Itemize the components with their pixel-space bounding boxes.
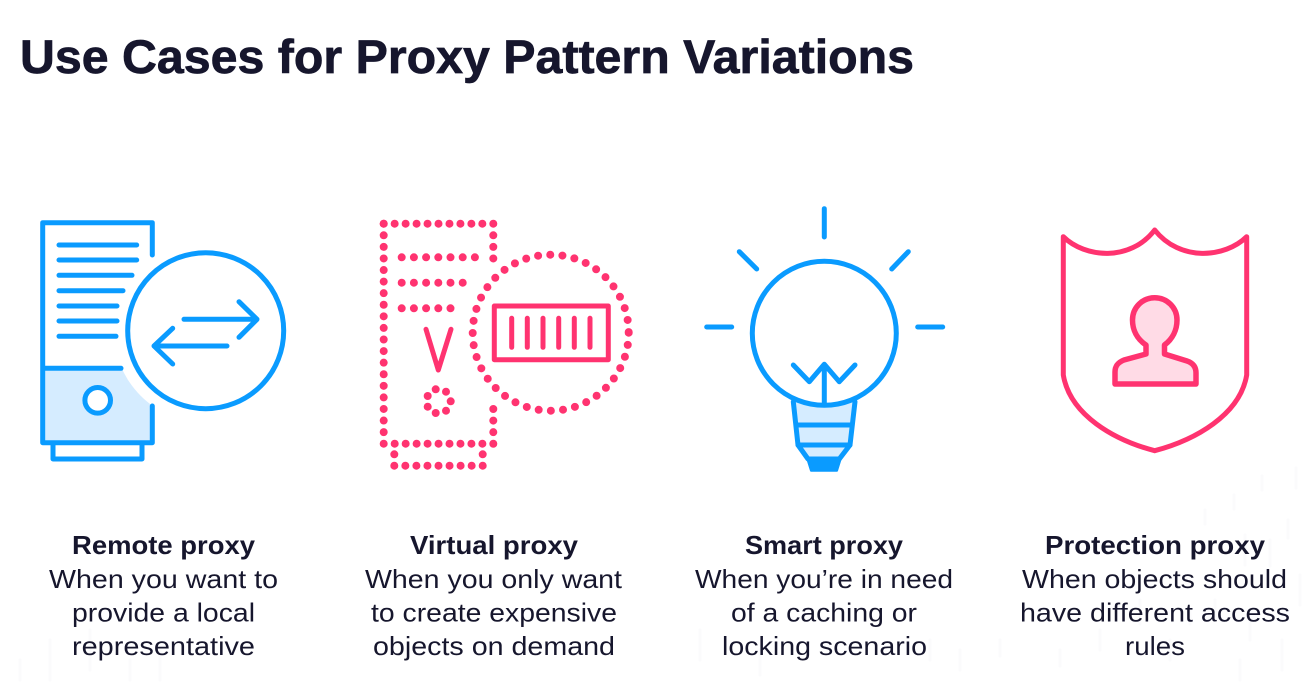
text block: remote proxy [49, 530, 278, 661]
text block: remote proxy: Remote proxy [72, 530, 256, 560]
text block: virtual proxy: When you only want [365, 564, 623, 594]
text block: protection proxy: When objects should [1022, 564, 1287, 594]
text block: protection proxy [1020, 530, 1290, 661]
text block: virtual proxy: Virtual proxy [410, 530, 579, 560]
icon: protection shield with user [1063, 230, 1247, 451]
text block: smart proxy: When you’re in need [695, 564, 953, 594]
icon: remote server with exchange arrows [43, 223, 298, 459]
icon: virtual dotted server with memory chip [384, 224, 629, 466]
text block: smart proxy: locking scenario [722, 631, 927, 661]
title: Use Cases for Proxy Pattern Variations [20, 31, 914, 84]
text block: remote proxy: When you want to [49, 564, 278, 594]
text block: smart proxy: Smart proxy [745, 530, 904, 560]
text block: remote proxy: provide a local [72, 598, 255, 628]
text block: virtual proxy: to create expensive [371, 598, 617, 628]
text block: protection proxy: rules [1125, 631, 1185, 661]
text block: protection proxy: Protection proxy [1045, 530, 1266, 560]
text block: virtual proxy [365, 530, 623, 661]
text block: remote proxy: representative [72, 631, 255, 661]
text block: protection proxy: have different access [1020, 598, 1290, 628]
text block: virtual proxy: objects on demand [373, 631, 615, 661]
text block: smart proxy: of a caching or [731, 598, 917, 628]
text block: smart proxy [695, 530, 953, 661]
icon: smart light bulb [707, 209, 943, 471]
